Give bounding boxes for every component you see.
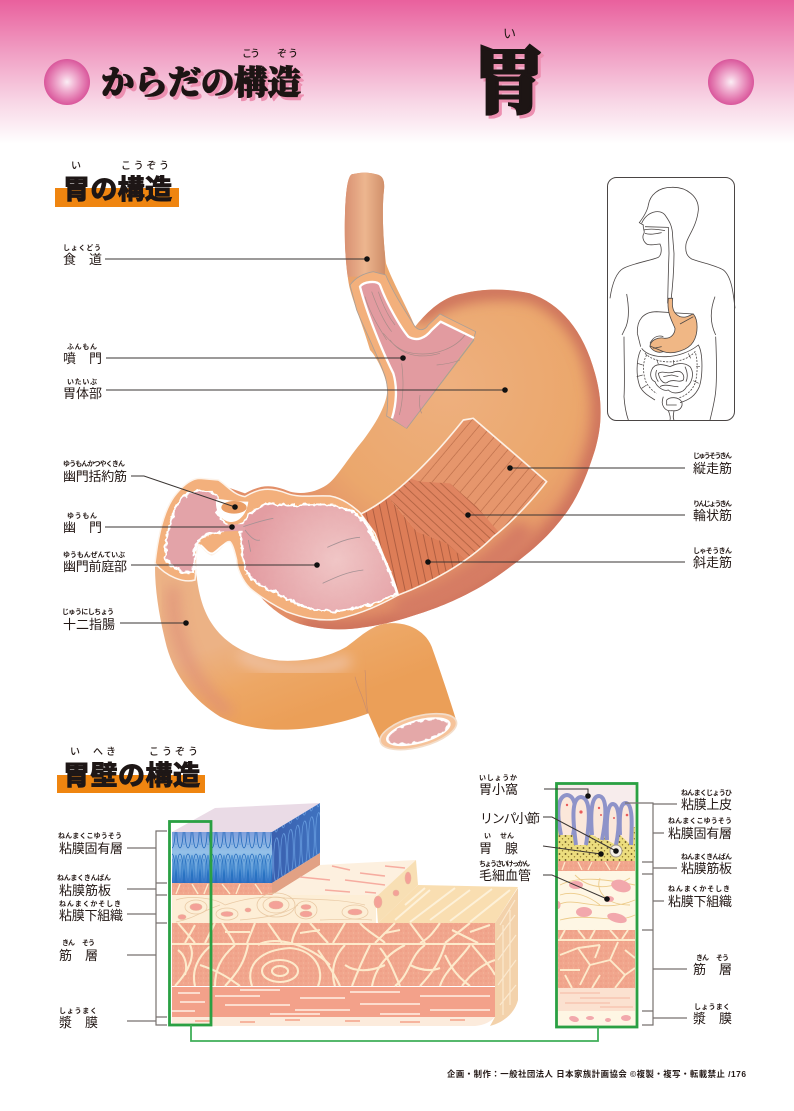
cut: pyloric antrum section <box>155 478 398 620</box>
muscle layer <box>172 885 518 986</box>
label: pylorus <box>63 511 235 535</box>
label: gastric pit <box>479 773 591 799</box>
label: muscle layer right <box>693 953 732 977</box>
heading: stomach structure <box>55 160 179 207</box>
label: serosa left: しょうまく <box>59 1006 97 1015</box>
label: pyloric antrum: 幽門前庭部 <box>63 559 127 574</box>
label: oblique muscle: しゃそうきん <box>693 546 732 555</box>
label: circular muscle: 輪状筋 <box>693 508 732 523</box>
label: muscle layer left: きん <box>62 939 75 947</box>
label: lymph nodule <box>480 811 619 854</box>
label: capillary <box>479 859 610 902</box>
label: longitudinal muscle <box>507 451 732 476</box>
title: body structure: からだの構造 <box>101 57 301 104</box>
label: lamina propria right: ねんまくこゆうそう <box>668 816 732 825</box>
label: muscle layer left: 筋 層 <box>59 948 98 963</box>
label: oblique muscle: 斜走筋 <box>693 555 732 570</box>
label: muscularis mucosae right <box>681 852 732 876</box>
wall cross-section block <box>172 803 518 1026</box>
label: muscle layer left: そう <box>82 938 95 947</box>
heading: stomach wall structure: 胃壁の構造 <box>63 761 200 791</box>
label: lymph nodule: リンパ小節 <box>480 811 540 826</box>
stomach body <box>217 172 601 629</box>
duodenum <box>155 567 457 740</box>
label: oblique muscle <box>425 546 732 570</box>
label: submucosa right: 粘膜下組織 <box>668 894 732 909</box>
label: muscle layer right: そう <box>716 953 729 962</box>
title: stomach: 胃 <box>473 24 545 128</box>
title: stomach: い <box>503 26 516 41</box>
inset: body location of stomach <box>608 178 735 420</box>
icon: left pink ball <box>44 59 90 105</box>
label: muscularis mucosae left: 粘膜筋板 <box>59 883 111 898</box>
left green selection <box>170 822 211 1025</box>
serosa in column <box>558 988 635 1023</box>
label: cardia <box>63 343 406 366</box>
muscularis mucosae strip <box>172 853 320 895</box>
epithelium block <box>172 803 320 883</box>
heading: stomach structure: い <box>71 161 81 172</box>
label: muscularis mucosae left <box>57 873 111 898</box>
heading: stomach wall structure: い <box>70 747 80 758</box>
label: pyloric antrum: ゆうもんぜんていぶ <box>63 550 125 559</box>
label: gastric pit: いしょうか <box>479 773 517 782</box>
title: stomach: 胃 <box>476 27 548 131</box>
label: lamina propria left: ねんまくこゆうそう <box>58 831 122 840</box>
label: lamina propria right: 粘膜固有層 <box>668 826 732 841</box>
label: pyloric sphincter <box>63 459 238 510</box>
label: duodenum: じゅうにしちょう <box>62 607 114 616</box>
label: esophagus <box>63 243 370 267</box>
duodenum cut end <box>376 707 460 757</box>
heading: stomach structure: こうぞう <box>121 160 169 172</box>
label: serosa right <box>693 1002 732 1026</box>
right brackets <box>625 803 687 1025</box>
label: capillary: ちょうさいけっかん <box>479 859 530 868</box>
muscle layers in column <box>558 930 635 988</box>
title: body structure: ぞう <box>277 48 298 60</box>
label: serosa left <box>59 1006 98 1030</box>
footer credit: 企画・制作：一般社団法人 日本家族計画協会 ©複製・複写・転載禁止 /176 <box>447 1069 746 1079</box>
label: duodenum <box>62 607 189 632</box>
label: submucosa left: ねんまくかそしき <box>59 900 121 908</box>
cut: cardia section <box>350 272 476 428</box>
label: longitudinal muscle: 縦走筋 <box>693 461 732 476</box>
label: serosa right: 漿 膜 <box>693 1011 732 1026</box>
submucosa with vessels <box>556 875 635 925</box>
label: muscle layer left <box>59 938 98 963</box>
label: lamina propria left: 粘膜固有層 <box>59 841 123 856</box>
heading: stomach structure: 胃の構造 <box>63 175 172 205</box>
label: submucosa left: 粘膜下組織 <box>59 908 123 923</box>
label: pylorus: 幽 門 <box>63 520 102 535</box>
label: gastric pit: 胃小窩 <box>479 782 518 797</box>
label: muscle layer right: 筋 層 <box>693 962 732 977</box>
detail column: layered gastric wall <box>556 783 637 1027</box>
label: muscle layer right: きん <box>696 954 709 962</box>
label: submucosa right <box>668 885 732 909</box>
small intestine <box>651 364 692 393</box>
label: serosa right: しょうまく <box>694 1002 730 1011</box>
gastric pits and epithelium <box>558 785 635 861</box>
submucosa layer <box>172 860 418 923</box>
title: body structure: からだの構造 <box>104 60 304 107</box>
label: epithelium right: 粘膜上皮 <box>681 797 732 812</box>
label: circular muscle <box>465 499 732 523</box>
heading: stomach wall structure: こうぞう <box>149 746 198 758</box>
left brackets <box>127 831 167 1025</box>
label: longitudinal muscle: じゅうそうきん <box>693 451 732 460</box>
label: submucosa right: ねんまくかそしき <box>668 885 730 893</box>
heading: stomach wall structure: へき <box>93 746 116 758</box>
label: gastric gland: い <box>484 832 491 840</box>
label: epithelium right <box>681 788 732 812</box>
label: capillary: 毛細血管 <box>479 868 531 883</box>
label: muscularis mucosae right: 粘膜筋板 <box>681 861 732 876</box>
title: body structure: こう <box>242 48 260 60</box>
label: epithelium right: ねんまくじょうひ <box>681 788 732 797</box>
muscularis mucosae band <box>558 861 635 871</box>
label: esophagus: 食 道 <box>63 252 102 267</box>
serosa layer <box>172 987 495 1026</box>
right side face <box>490 888 518 1026</box>
colon outline <box>637 345 702 403</box>
label: pylorus: ゆうもん <box>67 511 97 520</box>
green connector <box>191 1025 598 1041</box>
stomach illustration <box>155 172 601 757</box>
label: pyloric antrum <box>63 550 320 574</box>
label: gastric gland: せん <box>500 832 514 840</box>
cut: muscle layers <box>357 417 550 597</box>
label: circular muscle: りんじょうきん <box>693 499 732 508</box>
label: submucosa left <box>59 900 123 923</box>
header band <box>0 0 794 144</box>
label: cardia: 噴 門 <box>63 351 102 366</box>
label: esophagus: しょくどう <box>63 243 101 252</box>
label: cardia: ふんもん <box>67 343 97 351</box>
label: muscularis mucosae right: ねんまくきんばん <box>681 852 732 861</box>
label: gastric gland <box>479 832 604 857</box>
label: pyloric sphincter: 幽門括約筋 <box>63 469 127 484</box>
right green selection <box>556 784 637 1027</box>
label: lamina propria left <box>58 831 123 856</box>
label: gastric gland: 胃 腺 <box>479 841 518 856</box>
label: stomach body <box>63 378 508 401</box>
label: muscularis mucosae left: ねんまくきんばん <box>57 873 111 882</box>
icon: right pink ball <box>708 59 754 105</box>
label: serosa left: 漿 膜 <box>59 1015 98 1030</box>
heading: stomach wall structure <box>57 746 205 793</box>
label: pyloric sphincter: ゆうもんかつやくきん <box>63 459 125 468</box>
label: stomach body: 胃体部 <box>63 386 102 401</box>
label: lamina propria right <box>668 816 732 841</box>
label: stomach body: いたいぶ <box>67 378 97 386</box>
label: duodenum: 十二指腸 <box>63 617 115 632</box>
